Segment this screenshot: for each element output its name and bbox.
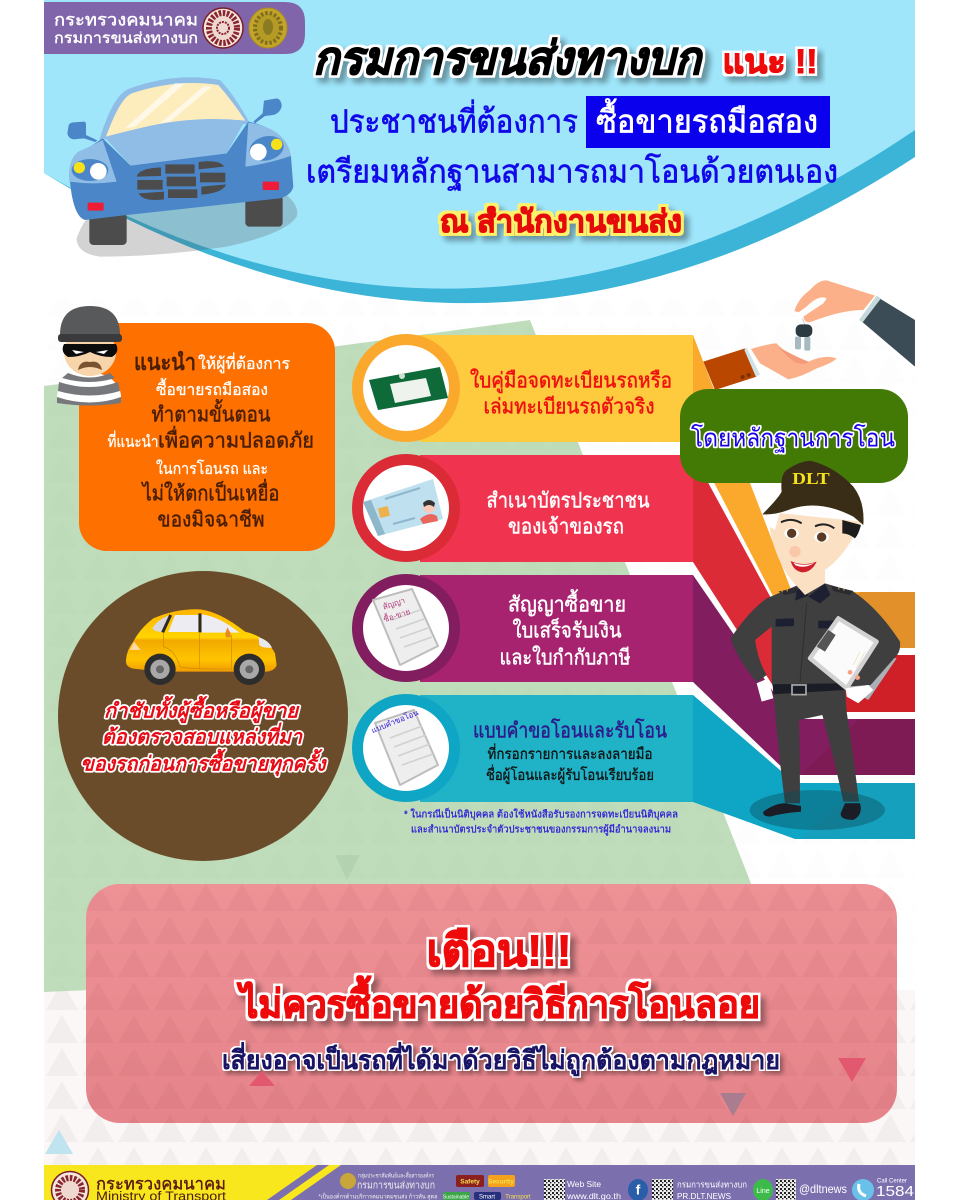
panel: sky header curve xyxy=(44,0,915,303)
icon: ID card xyxy=(363,479,443,536)
panel: card 1 registration book: เล่มทะเบียนรถตัวจริง xyxy=(484,396,654,419)
panel: card 4 transfer form: แบบคำขอโอนและรับโอน xyxy=(473,719,667,743)
panel: brown circle warning xyxy=(58,571,348,861)
icon: green book xyxy=(369,367,448,410)
decorative triangles xyxy=(45,1058,866,1154)
green diagonal background xyxy=(44,320,781,992)
footer: Call Center xyxy=(877,1179,907,1185)
icon: facebook: f xyxy=(636,1182,641,1198)
panel: card 2 ID card: สำเนาบัตรประชาชน xyxy=(486,490,650,513)
footer: @dltnews xyxy=(799,1182,847,1196)
subtitle line 2: เตรียมหลักฐานสามารถมาโอนด้วยตนเอง xyxy=(306,153,838,191)
icon: footer seal xyxy=(52,1172,88,1200)
footnote: * ในกรณีเป็นนิติบุคคล ต้องใช้หนังสือรับรองการจดทะเบียนนิติบุคคล xyxy=(404,807,678,821)
panel: card 4 transfer form: ชื่อผู้โอนและผู้รับโอนเรียบร้อย xyxy=(486,764,654,784)
title: แนะ !! xyxy=(722,43,818,81)
panel: brown circle warning: ต้องตรวจสอบแหล่งที่มา xyxy=(102,722,304,748)
icon: department seal xyxy=(249,8,287,48)
panel: card 3 contract: สัญญาซื้อขาย xyxy=(508,590,626,617)
label: by transfer documents: โดยหลักฐานการโอน xyxy=(691,424,895,453)
subtitle line 1: ประชาชนที่ต้องการ xyxy=(330,99,578,139)
icon: form paper xyxy=(370,707,438,785)
panel: brown circle warning: ของรถก่อนการซื้อขายทุกครั้ง xyxy=(80,748,328,776)
icon: QR line xyxy=(776,1179,796,1200)
face xyxy=(765,512,862,595)
panel: orange advice: ในการโอนรถ และ xyxy=(156,459,268,478)
header badge: ministry: กระทรวงคมนาคม xyxy=(54,10,198,29)
panel: orange advice: ไม่ให้ตกเป็นเหยื่อ xyxy=(141,479,280,506)
panel: warning box: เสี่ยงอาจเป็นรถที่ได้มาด้วยวิธีไม่ถูกต้องตามกฎหมาย xyxy=(222,1042,780,1076)
panel: card 3 contract xyxy=(352,574,693,682)
icon: DLT officer: DLT xyxy=(792,469,830,488)
footer: กรมการขนส่งทางบก xyxy=(677,1179,747,1189)
cap xyxy=(762,461,864,525)
belt xyxy=(773,683,844,694)
panel: brown circle warning: กำชับทั้งผู้ซื้อหรือผู้ขาย xyxy=(104,695,300,723)
panel: orange advice: เพื่อความปลอดภัย xyxy=(158,426,314,453)
panel: orange advice: ทำตามขั้นตอน xyxy=(152,400,270,427)
panel: orange advice: ของมิจฉาชีพ xyxy=(158,509,264,532)
shoes xyxy=(763,803,861,820)
icon: thief xyxy=(57,306,122,406)
panel: warning box xyxy=(86,884,897,1123)
panel: card 3 contract: ใบเสร็จรับเงิน xyxy=(512,617,622,643)
footer: Security xyxy=(488,1179,514,1186)
footnote: และสำเนาบัตรประจำตัวประชาชนของกรรมการผู้มีอำนาจลงนาม xyxy=(411,824,671,836)
icon: hands passing keys xyxy=(703,280,915,390)
panel: orange advice: แนะนำ xyxy=(134,349,196,375)
footer: Web Site xyxy=(567,1180,602,1189)
icon: ministry seal xyxy=(203,8,243,48)
panel: card 1 registration book: ใบคู่มือจดทะเบียนรถหรือ xyxy=(470,369,672,394)
jacket details xyxy=(795,583,830,603)
ground shadow xyxy=(750,790,885,830)
footnote xyxy=(404,807,678,836)
icon: form paper: แบบคำขอโอน xyxy=(370,707,420,735)
footer: Safety xyxy=(460,1179,480,1186)
icon: yellow car xyxy=(126,609,277,685)
panel: orange advice xyxy=(79,323,335,551)
jacket and arms xyxy=(731,583,900,688)
ribbon folds toward officer xyxy=(693,335,915,839)
icon: blue car xyxy=(67,77,297,257)
panel: card 1 registration book xyxy=(352,334,693,442)
facial features xyxy=(784,528,799,539)
footer xyxy=(44,1165,915,1200)
panel: card 4 transfer form xyxy=(352,694,693,802)
clipboard xyxy=(810,618,877,688)
left hand xyxy=(757,678,773,702)
icon: QR web xyxy=(544,1179,565,1200)
right hand xyxy=(846,685,873,703)
subtitle line 1 xyxy=(330,96,830,148)
clipboard back edge xyxy=(848,655,897,700)
footer: 1584 xyxy=(876,1183,914,1200)
panel: card 4 transfer form: ที่กรอกรายการและลงลายมือ xyxy=(488,743,652,763)
icon: contract paper xyxy=(373,589,438,665)
icon: line xyxy=(753,1179,773,1200)
icon: contract paper: สัญญา xyxy=(382,596,406,611)
panel: orange advice: ซื้อขายรถมือสอง xyxy=(156,378,268,399)
subtitle line 1: ซื้อขายรถมือสอง xyxy=(596,98,818,139)
icon: line: Line xyxy=(756,1188,770,1195)
panel: orange advice: ที่แนะนำ xyxy=(108,430,158,451)
panel: card 2 ID card xyxy=(352,454,693,562)
footer: กลุ่มประชาสัมพันธ์และสื่อสารองค์กร xyxy=(358,1172,435,1180)
footer: กระทรวงคมนาคม xyxy=(96,1174,226,1193)
panel: warning box: ไม่ควรซื้อขายด้วยวิธีการโอนลอย xyxy=(236,975,760,1026)
panel: orange advice: ให้ผู้ที่ต้องการ xyxy=(198,352,290,374)
subtitle line 3: ณ สำนักงานขนส่ง xyxy=(440,204,682,239)
icon: DLT officer xyxy=(731,461,900,830)
legs xyxy=(773,687,859,803)
footer: กรมการขนส่งทางบก xyxy=(357,1181,435,1192)
icon: QR facebook xyxy=(652,1179,673,1200)
icon: contract paper: ซื้อ-ขาย xyxy=(382,605,411,624)
title: กรมการขนส่งทางบก xyxy=(313,32,704,84)
panel: warning box: เตือน!!! xyxy=(426,927,572,976)
label: by transfer documents xyxy=(680,389,908,483)
panel: card 3 contract: และใบกำกับภาษี xyxy=(500,646,630,670)
icon: phone xyxy=(852,1179,874,1200)
header badge: ministry: กรมการขนส่งทางบก xyxy=(54,30,198,47)
header badge: ministry xyxy=(44,2,305,54)
icon: facebook xyxy=(628,1179,648,1200)
panel: card 2 ID card: ของเจ้าของรถ xyxy=(508,516,624,539)
